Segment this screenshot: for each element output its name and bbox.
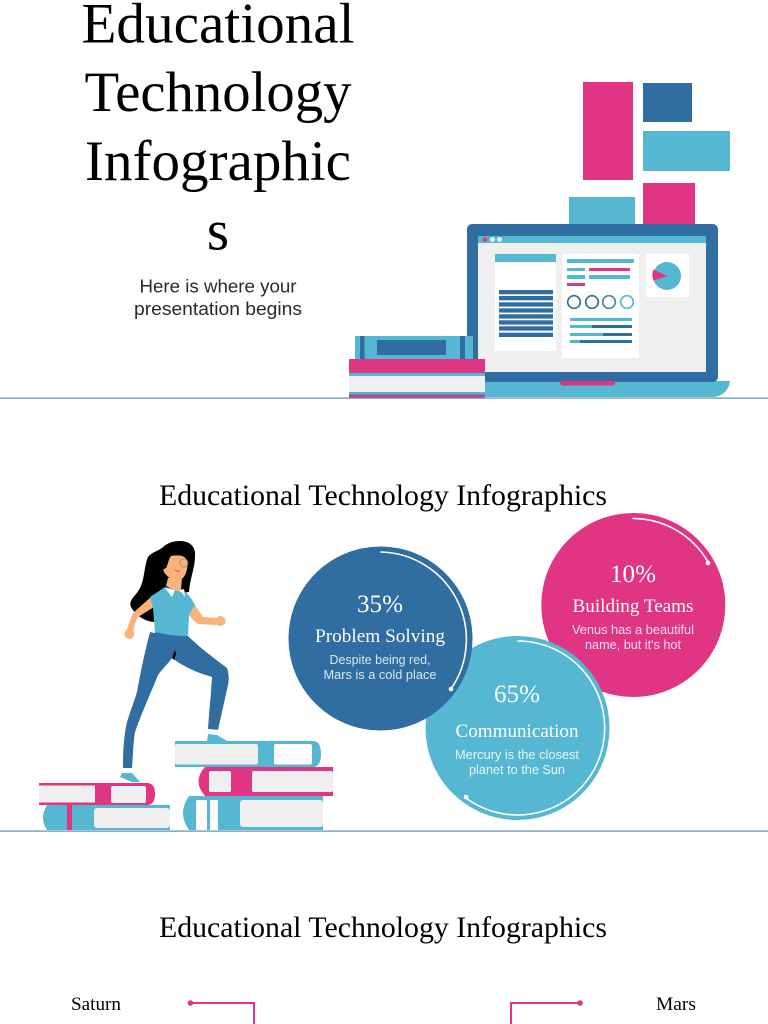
face <box>163 554 187 581</box>
ground line 1 <box>0 398 768 399</box>
book: right bottom <box>183 796 323 830</box>
front arm <box>189 605 225 625</box>
circle: Building Teams 10%: name, but it's hot <box>585 638 682 652</box>
circle: Problem Solving 35%: Mars is a cold place <box>324 668 437 682</box>
socks <box>122 729 218 773</box>
neck <box>166 578 183 593</box>
subtitle: presentation begins <box>134 299 302 319</box>
ground line 2 <box>0 830 768 832</box>
laptop panel: dashboard <box>562 254 639 358</box>
circle: Communication 65%: planet to the Sun <box>469 763 565 777</box>
books under the character <box>39 741 333 830</box>
circle: Building Teams 10%: Building Teams <box>572 596 694 617</box>
floating blocks <box>569 82 730 225</box>
circle: Problem Solving 35% <box>288 546 472 730</box>
laptop panel: pie chart <box>646 254 689 297</box>
smile <box>175 570 180 571</box>
section heading 3: Educational Technology Infographics <box>159 911 607 944</box>
subtitle <box>134 276 302 319</box>
hair back <box>130 541 195 622</box>
circle: Problem Solving 35%: Problem Solving <box>315 626 445 647</box>
circle: Communication 65%: Communication <box>456 721 579 742</box>
circle: Communication 65% <box>426 636 610 820</box>
title: Infographic <box>85 130 351 193</box>
laptop <box>467 224 730 397</box>
collar <box>165 588 185 597</box>
rear leg <box>123 632 176 768</box>
circle: Communication 65%: Mercury is the closest <box>455 748 580 762</box>
book: lower left top <box>39 783 155 805</box>
rear arm <box>126 597 154 634</box>
book: middle <box>198 767 333 796</box>
circle: Communication 65%: 65% <box>494 681 540 708</box>
hair fringe <box>162 550 188 570</box>
book stack beside laptop <box>349 336 485 398</box>
character climbing books <box>120 541 229 782</box>
section heading 2: Educational Technology Infographics <box>159 479 607 512</box>
title: s <box>207 200 229 262</box>
title <box>82 0 354 262</box>
book: lower left bottom <box>43 805 170 830</box>
circle: Problem Solving 35%: Despite being red, <box>330 653 430 667</box>
subtitle: Here is where your <box>140 276 297 296</box>
leg shadow <box>172 650 176 660</box>
front leg <box>155 632 229 730</box>
circle: Building Teams 10%: Venus has a beautiful <box>572 623 694 637</box>
book: top <box>175 741 321 767</box>
circle: Building Teams 10%: 10% <box>610 561 656 588</box>
circle: Building Teams 10% <box>541 513 725 697</box>
title: Technology <box>84 61 352 124</box>
glasses <box>180 559 188 567</box>
circle: Problem Solving 35%: 35% <box>357 591 403 618</box>
shirt <box>150 587 195 636</box>
label: Saturn: Saturn <box>71 994 122 1015</box>
connector: Mars <box>511 1000 583 1024</box>
laptop panel: text document <box>495 254 556 351</box>
shoes <box>120 734 227 782</box>
label: Mars: Mars <box>656 994 696 1015</box>
connector: Saturn <box>188 1000 254 1024</box>
